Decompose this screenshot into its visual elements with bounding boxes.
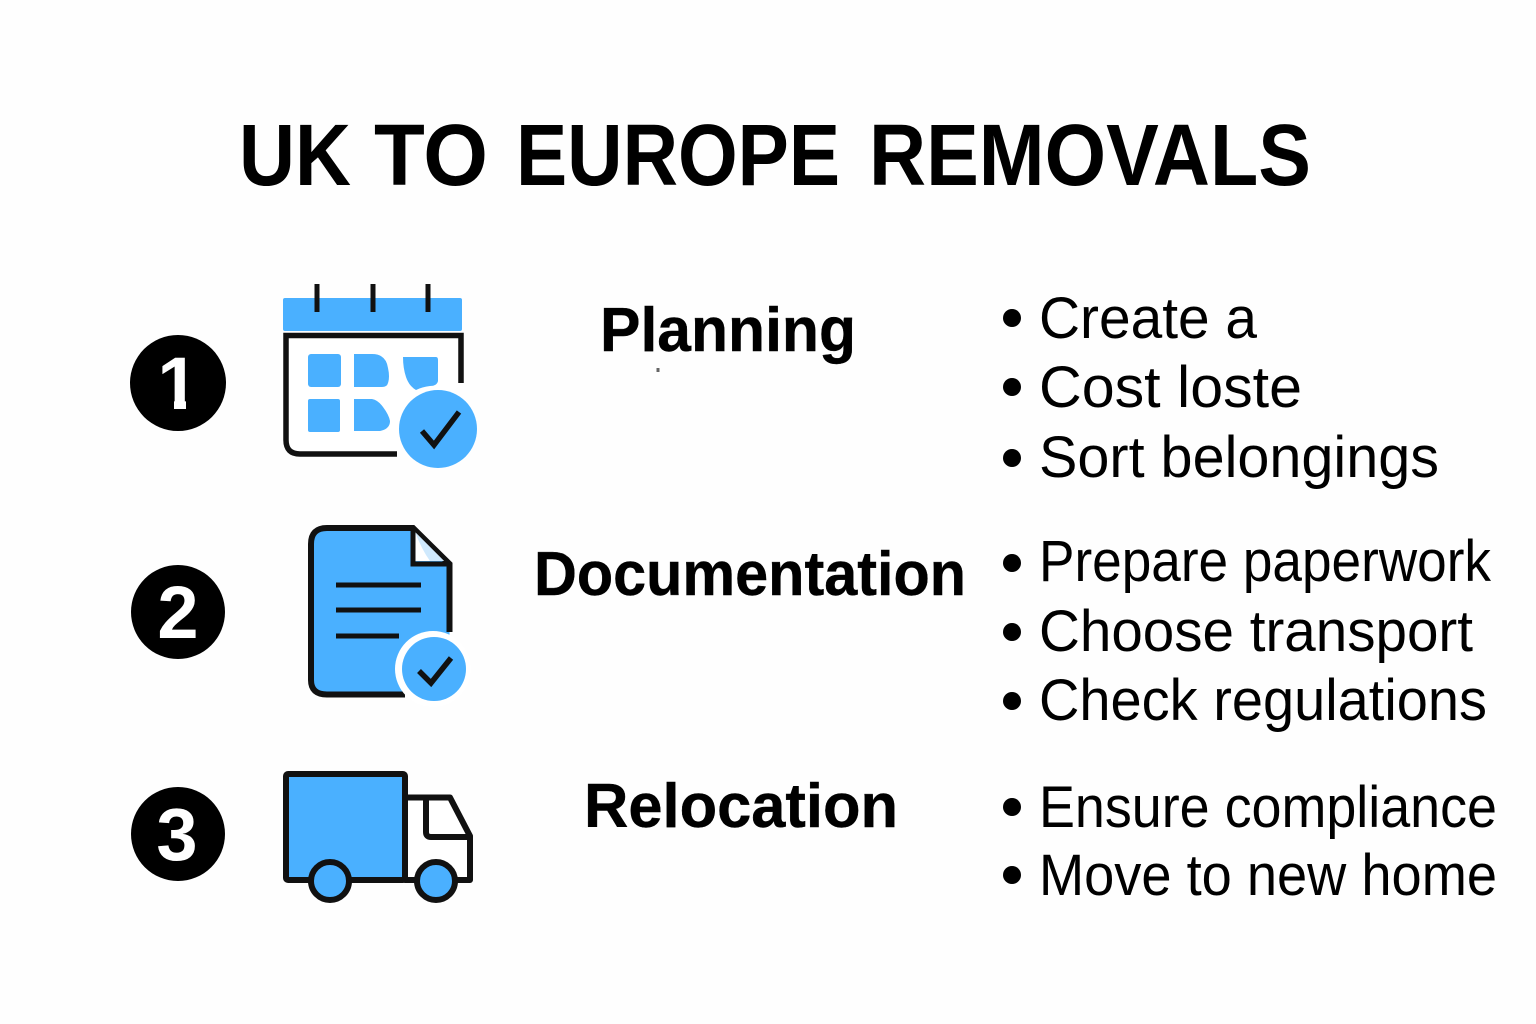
bullet list: planning: Sort belongings bbox=[1039, 425, 1439, 490]
number badge 3: 3 bbox=[156, 793, 198, 876]
heading: Planning: Planning bbox=[600, 296, 856, 365]
title: UK bbox=[239, 107, 351, 204]
bullet list: documentation: Choose transport bbox=[1039, 599, 1473, 664]
number badge 1 bbox=[130, 335, 226, 431]
heading: Relocation: Relocation bbox=[584, 772, 898, 841]
number badge 1: 1 bbox=[157, 342, 199, 425]
bullet list: planning bbox=[1003, 286, 1439, 490]
title: TO bbox=[374, 107, 488, 204]
number badge 2 bbox=[131, 565, 225, 659]
title: REMOVALS bbox=[869, 107, 1311, 204]
bullet list: planning: Cost loste bbox=[1039, 355, 1302, 420]
bullet list: documentation: Check regulations bbox=[1039, 668, 1487, 733]
number badge 3 bbox=[131, 787, 225, 881]
bullet list: relocation: Move to new home bbox=[1039, 843, 1497, 908]
number badge 2: 2 bbox=[157, 571, 199, 654]
bullet list: relocation: Ensure compliance bbox=[1039, 775, 1497, 840]
title bbox=[239, 107, 1311, 204]
heading: Documentation: Documentation bbox=[534, 540, 966, 609]
icon: calendar with check bbox=[283, 284, 477, 468]
bullet list: documentation: Prepare paperwork bbox=[1039, 529, 1492, 594]
icon: removal truck bbox=[286, 774, 470, 900]
bullet list: planning: Create a bbox=[1039, 286, 1258, 351]
bullet list: documentation bbox=[1003, 529, 1492, 733]
title: EUROPE bbox=[516, 107, 840, 204]
icon: document with check bbox=[311, 527, 471, 707]
bullet list: relocation bbox=[1003, 775, 1497, 908]
